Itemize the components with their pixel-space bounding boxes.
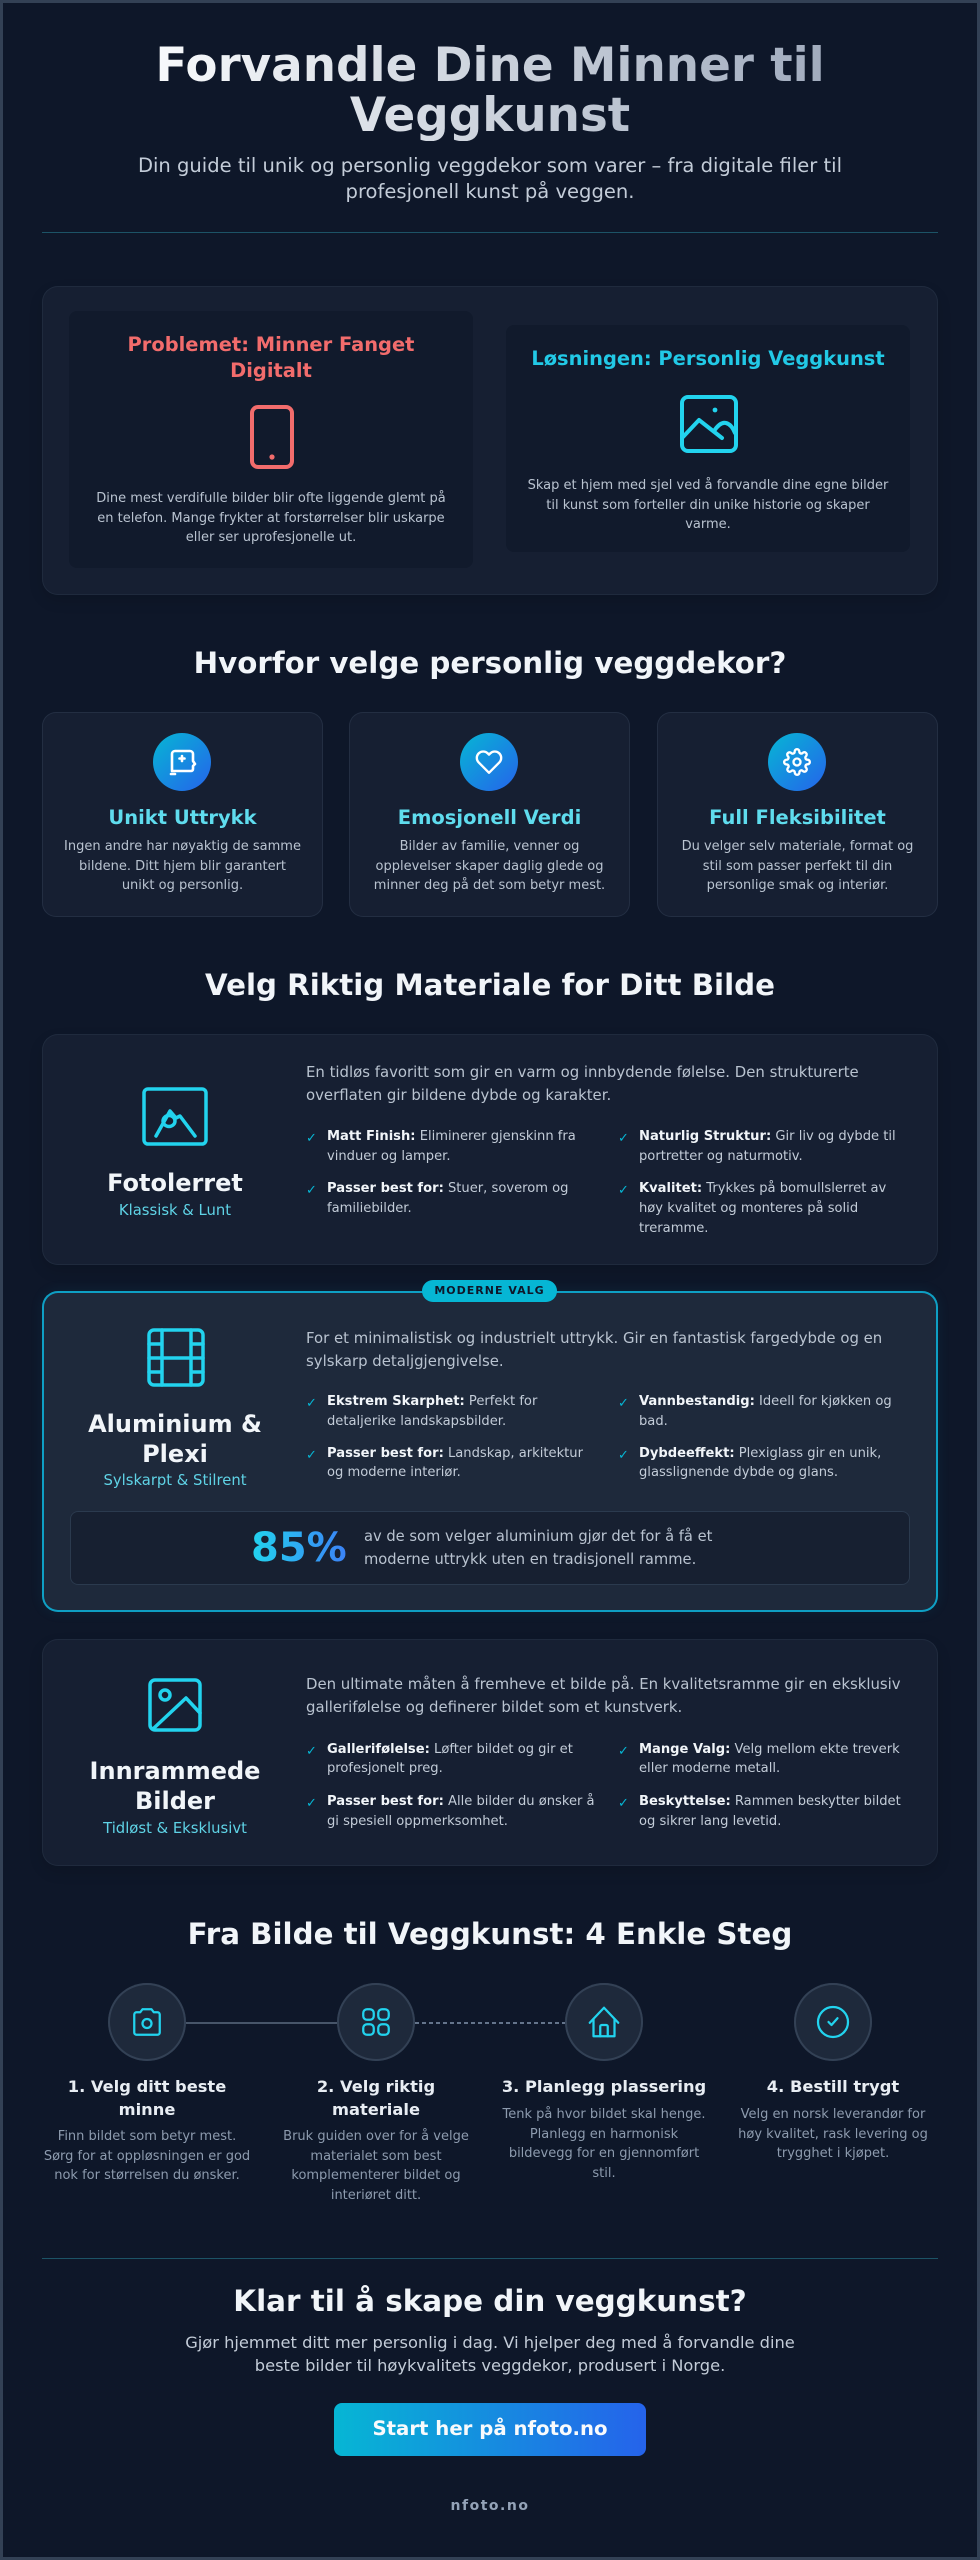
feature: sharpness: [306, 1394, 538, 1429]
CTA text: [42, 2331, 938, 2377]
feature: best for: gi spesiell oppmerksomhet.: [327, 1814, 508, 1829]
feature: water resistance: Vannbestandig: Ideell for kjøkken og: [639, 1394, 892, 1409]
feature: gallery feeling: ✓: [306, 1744, 317, 1758]
step 3: [502, 1983, 706, 2181]
statistic number: 85%: [251, 1525, 347, 1571]
icon: heart: [460, 733, 518, 791]
step 1: [44, 1983, 250, 2183]
feature: matt finish: vinduer og lamper.: [327, 1149, 451, 1164]
heading: four steps: Fra Bilde til Veggkunst: 4 Enkle Steg: [188, 1917, 792, 1951]
feature: depth effect: glasslignende dybde og glans.: [639, 1465, 838, 1480]
material description: gallerifølelse og definerer bildet som et kunstverk.: [306, 1698, 682, 1716]
feature: quality: treramme.: [639, 1221, 708, 1236]
material name: [90, 1757, 260, 1815]
problem heading: [128, 333, 414, 382]
feature: water resistance: ✓: [618, 1396, 629, 1411]
card text: minner deg på det som betyr mest.: [374, 878, 605, 893]
step text: Finn bildet som betyr mest.: [58, 2129, 236, 2144]
step text: trygghet i kjøpet.: [777, 2146, 889, 2161]
title: [150, 42, 830, 141]
card text: unikt og personlig.: [122, 878, 243, 893]
feature: depth effect: Dybdeeffekt: Plexiglass gir en unik,: [639, 1446, 881, 1460]
CTA button: [334, 2403, 646, 2456]
feature: gallery feeling: Gallerifølelse: Løfter bildet og gir et: [327, 1742, 573, 1756]
arrow: solid connector between step 1 and 2: [186, 2022, 337, 2024]
CTA text: Gjør hjemmet ditt mer personlig i dag. Vi hjelper deg med å forvandle dine: [185, 2333, 795, 2352]
step text: stil.: [592, 2166, 616, 2181]
card text: [682, 839, 913, 893]
feature: depth effect: [618, 1446, 881, 1480]
badge: modern choice: [422, 1280, 557, 1302]
feature: best for: og moderne interiør.: [327, 1465, 461, 1480]
feature: many choices: eller moderne metall.: [639, 1761, 780, 1776]
step text: [502, 2106, 705, 2181]
panel: canvas material: [42, 1034, 938, 1265]
CTA button: Start her på nfoto.no: [372, 2417, 608, 2440]
feature: natural structure: [618, 1129, 896, 1164]
heading: why personal decor: Hvorfor velge personlig veggdekor?: [194, 646, 786, 680]
feature: protection: Beskyttelse: Rammen beskytter bildet: [639, 1794, 901, 1809]
panel: framed pictures: [42, 1639, 938, 1866]
icon: gear: [768, 733, 826, 791]
step text: [719, 2105, 947, 2164]
icon: film: [147, 1328, 205, 1387]
problem text: [96, 490, 446, 545]
step title: 2. Velg riktig: [317, 2077, 435, 2096]
feature: natural structure: portretter og naturmotiv.: [639, 1149, 803, 1164]
call to action: [42, 2258, 938, 2518]
step title: minne: [119, 2100, 175, 2119]
feature: best for: ✓: [306, 1796, 317, 1811]
subtitle: [138, 154, 842, 203]
feature: water resistance: bad.: [639, 1414, 668, 1429]
material name: [88, 1410, 262, 1468]
feature: matt finish: ✓: [306, 1131, 317, 1146]
feature: many choices: ✓: [618, 1744, 629, 1758]
feature: natural structure: Naturlig Struktur: Gir liv og dybde til: [639, 1129, 896, 1144]
step text: Bruk guiden over for å velge: [283, 2129, 469, 2144]
card text: [64, 839, 301, 893]
feature: gallery feeling: [306, 1742, 573, 1776]
step title: 4. Bestill trygt: [767, 2077, 899, 2096]
header divider: [42, 232, 938, 233]
icon: unique: [153, 733, 211, 791]
panel: problem: [69, 311, 473, 568]
feature: many choices: Mange Valg: Velg mellom ekte treverk: [639, 1742, 900, 1756]
step title: 1. Velg ditt beste: [68, 2077, 226, 2096]
statistic text: [364, 1528, 712, 1568]
solution text: [528, 477, 888, 532]
feature: many choices: [618, 1742, 900, 1776]
material description: [306, 1675, 901, 1716]
feature: best for: Passer best for: Alle bilder du ønsker å: [327, 1794, 595, 1809]
icon: grid: [337, 1983, 415, 2061]
step text: interiøret ditt.: [331, 2188, 421, 2203]
feature: matt finish: Matt Finish: Eliminerer gjenskinn fra: [327, 1129, 576, 1144]
material tagline: Sylskarpt & Stilrent: [103, 1472, 247, 1489]
feature: protection: ✓: [618, 1796, 629, 1811]
card: emotional value: [349, 712, 630, 917]
material description: For et minimalistisk og industrielt uttrykk. Gir en fantastisk fargedybde og en: [306, 1329, 882, 1347]
arrow: dashed connector between step 2 and 3: [415, 2022, 565, 2024]
material tagline: Klassisk & Lunt: [119, 1202, 231, 1219]
solution text: Skap et hjem med sjel ved å forvandle dine egne bilder: [528, 478, 888, 493]
problem heading: Digitalt: [230, 359, 312, 382]
solution text: varme.: [685, 517, 731, 532]
card text: [374, 839, 605, 893]
feature: best for: [306, 1446, 583, 1480]
feature: best for: [306, 1181, 568, 1216]
solution text: til kunst som forteller din unike historie og skaper: [546, 498, 870, 513]
feature: best for: ✓: [306, 1448, 317, 1462]
feature: matt finish: [306, 1129, 576, 1164]
material name: Bilder: [135, 1787, 215, 1815]
step text: materialet som best: [310, 2149, 442, 2164]
panel: problem and solution: [42, 286, 938, 595]
icon: canvas: [142, 1087, 208, 1146]
badge: modern choice: MODERNE VALG: [434, 1284, 545, 1297]
material name: Plexi: [142, 1440, 208, 1468]
card text: Du velger selv materiale, format og: [682, 839, 913, 854]
feature: sharpness: ✓: [306, 1396, 317, 1411]
step 4: [738, 1983, 928, 2161]
icon: house: [565, 1983, 643, 2061]
feature: sharpness: detaljerike landskapsbilder.: [327, 1414, 506, 1429]
problem text: Dine mest verdifulle bilder blir ofte liggende glemt på: [96, 491, 446, 506]
callout: 85 percent statistic: [70, 1511, 910, 1585]
card text: bildene. Ditt hjem blir garantert: [79, 859, 286, 874]
card title: Full Fleksibilitet: [709, 806, 886, 828]
card text: Bilder av familie, venner og: [400, 839, 579, 854]
feature: best for: Passer best for: Stuer, soverom og: [327, 1181, 568, 1196]
step text: bildevegg for en gjennomført: [509, 2146, 699, 2161]
footer divider: [42, 2258, 938, 2259]
problem text: en telefon. Mange frykter at forstørrelser blir uskarpe: [97, 511, 445, 526]
material description: sylskarp detaljgjengivelse.: [306, 1352, 504, 1370]
material tagline: Tidløst & Eksklusivt: [103, 1820, 247, 1836]
material description: [306, 1063, 859, 1104]
feature: quality: Kvalitet: Trykkes på bomullslerret av: [639, 1181, 886, 1196]
card title: Unikt Uttrykk: [108, 806, 257, 828]
feature: water resistance: [618, 1394, 892, 1429]
icon: phone: [250, 405, 294, 469]
icon: picture: [680, 395, 738, 453]
material name: Innrammede: [90, 1757, 260, 1785]
material description: Den ultimate måten å fremheve et bilde på. En kvalitetsramme gir en eksklusiv: [306, 1675, 901, 1693]
CTA heading: Klar til å skape din veggkunst?: [233, 2284, 747, 2318]
material description: [306, 1329, 882, 1370]
step text: komplementerer bildet og: [291, 2168, 461, 2183]
material description: overflaten gir bildene dybde og karakter.: [306, 1086, 611, 1104]
material description: En tidløs favoritt som gir en varm og innbydende følelse. Den strukturerte: [306, 1063, 859, 1081]
icon: check circle: [794, 1983, 872, 2061]
panel: solution: [506, 325, 910, 552]
feature: gallery feeling: profesjonelt preg.: [327, 1761, 443, 1776]
problem text: eller ser uprofesjonelle ut.: [186, 530, 356, 545]
feature: best for: familiebilder.: [327, 1201, 412, 1216]
step text: [44, 2129, 250, 2183]
step text: Tenk på hvor bildet skal henge.: [503, 2107, 705, 2122]
step title: materiale: [332, 2100, 420, 2119]
card text: personlige smak og interiør.: [707, 878, 888, 893]
step title: [68, 2077, 226, 2119]
step text: Velg en norsk leverandør for: [741, 2107, 925, 2122]
step text: nok for størrelsen du ønsker.: [54, 2168, 240, 2183]
card title: Emosjonell Verdi: [398, 806, 581, 828]
feature: quality: høy kvalitet og monteres på solid: [639, 1201, 858, 1216]
feature: best for: [306, 1793, 595, 1829]
card text: Ingen andre har nøyaktig de samme: [64, 839, 301, 854]
step 2: [283, 1983, 469, 2203]
feature: best for: Passer best for: Landskap, arkitektur: [327, 1446, 583, 1460]
icon: camera: [108, 1983, 186, 2061]
heading: choose material: Velg Riktig Materiale for Ditt Bilde: [205, 968, 775, 1002]
card: full flexibility: [657, 712, 938, 917]
feature: quality: ✓: [618, 1183, 629, 1198]
feature: depth effect: ✓: [618, 1448, 629, 1462]
footer brand: nfoto.no: [451, 2498, 529, 2514]
title: Forvandle Dine Minner til: [155, 39, 825, 93]
feature: natural structure: ✓: [618, 1131, 629, 1146]
step text: høy kvalitet, rask levering og: [738, 2127, 928, 2142]
step text: Sørg for at oppløsningen er god: [44, 2149, 250, 2164]
card: unique expression: [42, 712, 323, 917]
problem heading: Problemet: Minner Fanget: [128, 333, 414, 356]
header: [42, 39, 938, 233]
material name: Aluminium &: [88, 1410, 262, 1438]
step title: 3. Planlegg plassering: [502, 2077, 706, 2096]
CTA text: beste bilder til høykvalitets veggdekor, produsert i Norge.: [255, 2356, 725, 2375]
step text: Planlegg en harmonisk: [530, 2127, 678, 2142]
feature: quality: [618, 1180, 886, 1236]
solution heading: Løsningen: Personlig Veggkunst: [531, 346, 885, 370]
card text: stil som passer perfekt til din: [703, 859, 892, 874]
statistic text: av de som velger aluminium gjør det for å få et: [364, 1528, 712, 1545]
card text: opplevelser skaper daglig glede og: [376, 859, 603, 874]
feature: protection: [618, 1794, 901, 1829]
step text: [283, 2128, 469, 2203]
feature: sharpness: Ekstrem Skarphet: Perfekt for: [327, 1394, 537, 1409]
feature: best for: ✓: [306, 1183, 317, 1198]
icon: framed picture: [148, 1678, 202, 1732]
material name: Fotolerret: [107, 1169, 243, 1197]
subtitle: profesjonell kunst på veggen.: [346, 180, 634, 203]
subtitle: Din guide til unik og personlig veggdekor som varer – fra digitale filer til: [138, 154, 842, 177]
feature: protection: og sikrer lang levetid.: [639, 1814, 781, 1829]
step title: [317, 2077, 435, 2119]
panel: aluminium and plexi: [42, 1291, 938, 1612]
statistic text: moderne uttrykk uten en tradisjonell ramme.: [364, 1551, 696, 1568]
title: Veggkunst: [350, 88, 630, 142]
